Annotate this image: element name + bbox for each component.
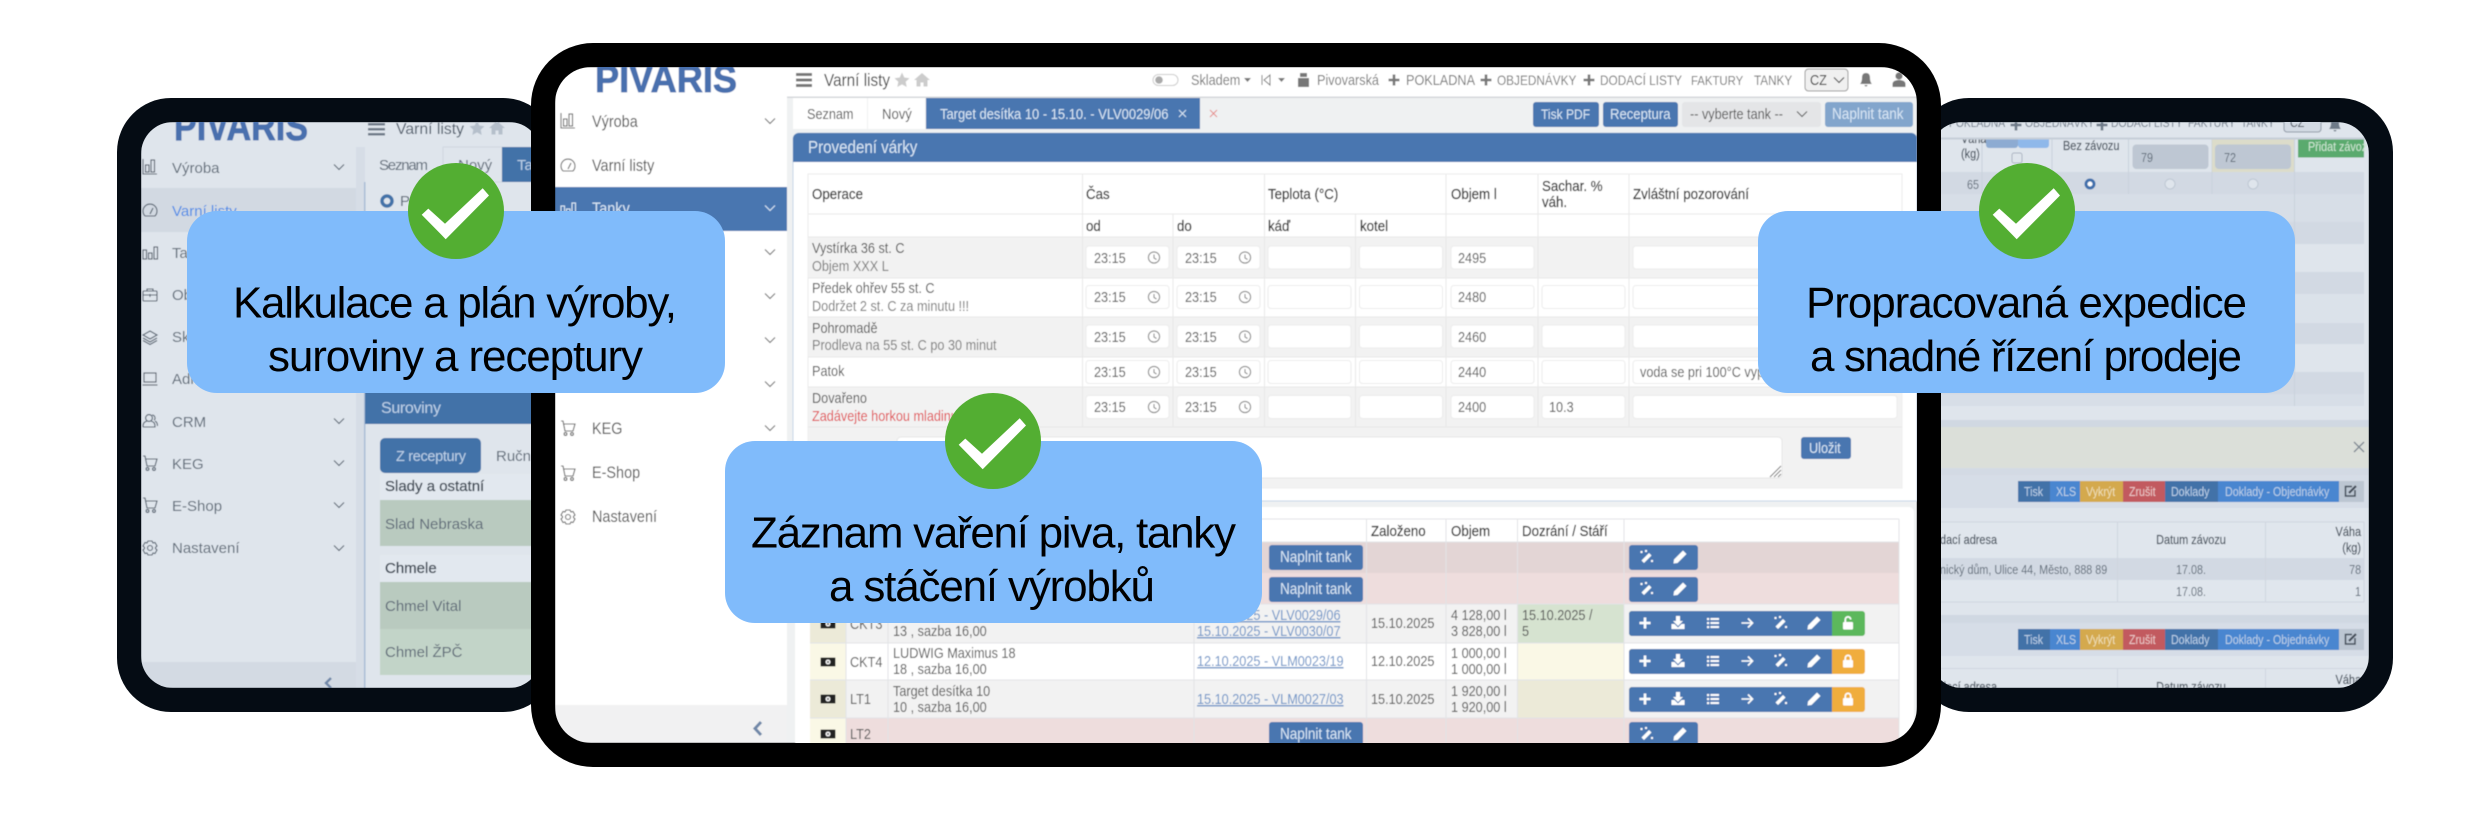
right order block 2: Doklady [2171,633,2210,647]
tank rows text: 12.10.2025 - VLM0023/19 [1197,653,1344,669]
left main content: Suroviny [381,400,441,417]
fill-tank buttons: Naplnit tank [1280,726,1352,743]
panel: brewing execution: káď [1268,218,1290,235]
center tab row: -- vyberte tank -- [1690,106,1783,122]
left sidebar navigation: Výroba [172,160,220,177]
panel: brewing execution: Čas [1086,185,1110,203]
brewing input fields: 23:15 [1094,329,1126,345]
right order block 2: Váha [2336,672,2361,687]
panel: brewing execution: Objem l [1451,186,1497,203]
panel: brewing execution: Zadávejte horkou mladinu [812,408,958,424]
center sidebar navigation: Tanky [592,200,630,218]
tank rows text: CKT4 [850,654,883,670]
tank rows text: 15.10.2025 - VLM0027/03 [1197,691,1344,707]
left main content: Chmel Vital [385,598,461,615]
right order block 1: XLS [2056,485,2076,499]
right order block 2: XLS [2056,633,2076,647]
brewing input fields: 23:15 [1185,399,1217,415]
left sidebar navigation: Objednávky [172,287,252,304]
center top bar: Skladem [1191,72,1240,88]
panel: brewing execution: Pohromadě [812,320,878,336]
center tab row: Receptura [1610,105,1671,122]
panel: brewing execution: váh. [1542,194,1567,211]
panel: brewing execution: Prodleva na 55 st. C po 30 minut [812,337,997,353]
panel: brewing execution: kotel [1360,218,1388,235]
device: left tablet, recipes and raw materials [117,98,560,712]
left main content: Pivo [400,193,429,210]
callout: dispatch and sales: a snadné řízení prodeje [1810,332,2242,381]
right top navigation: FAKTURY [2188,117,2236,130]
right order block 1: Váha [2336,524,2361,539]
tank rows text: 1 000,00 l [1451,661,1507,677]
left main content: Slady a ostatní [385,478,485,495]
center sidebar navigation: PIVARIS [595,59,737,101]
panel: brewing execution: Teplota (°C) [1268,186,1338,203]
tank rows text: 3 828,00 l [1451,623,1507,639]
left main content: Varní listy [396,121,464,138]
tank rows text: 5 [1522,623,1529,639]
left sidebar navigation: Nastavení [172,540,240,557]
left main content: Slad Nebraska [385,516,484,533]
panel: brewing execution: do [1177,218,1192,235]
center sidebar navigation [555,59,787,743]
right delivery table: 72 [2224,150,2236,165]
panel: tanks table [795,507,1914,748]
right top navigation: CZ [2290,115,2304,130]
tank rows text: LT2 [850,726,871,742]
device: right tablet, dispatch and sales [1915,98,2393,712]
callout: dispatch and sales [1758,163,2295,393]
tank rows text: 4 128,00 l [1451,607,1507,623]
callout: calculation and production plan: Kalkulace a plán výroby, [233,278,677,328]
tank rows text: Target desítka 10 [893,683,991,699]
right order block 1: Datum závozu [2156,532,2226,547]
right order block 1: Doklady [2171,485,2210,499]
left main content: Chmel ŽPČ [385,644,463,661]
right order block 2: Zrušit [2129,633,2156,647]
brewing input fields [1086,246,1897,418]
tank rows text: 15.10.2025 / [1522,607,1593,623]
center tab row: Tisk PDF [1541,106,1590,122]
callout: calculation and production plan: suroviny a receptury [268,332,643,381]
center sidebar navigation: Administrace [592,332,675,350]
tank rows text: 10 , sazba 16,00 [893,699,987,715]
panel: brewing execution: Sachar. % [1542,178,1603,195]
right order block 2 [1941,615,2369,688]
center sidebar navigation: Sklad [592,288,628,306]
brewing input fields: 23:15 [1094,399,1126,415]
left main content [356,122,531,688]
tank rows text: 18 , sazba 16,00 [893,661,987,677]
brewing input fields: 2480 [1458,289,1487,305]
panel: brewing execution: od [1086,218,1101,235]
right order block 2: Tisk [2024,633,2043,647]
right order block 1: 1 [2355,584,2361,599]
right order block 1: nický dům, Ulice 44, Město, 888 89 [1940,562,2108,577]
panel: brewing execution [793,133,1917,501]
center sidebar navigation: Objednávky [592,244,668,262]
right order block 1: dací adresa [1940,532,1997,547]
panel: tanks table: Dozrání / Stáří [1522,523,1608,540]
tank rows text: CKT3 [850,616,882,632]
left sidebar navigation: Sklad [172,329,210,346]
right order block 2: Datum závozu [2156,679,2226,694]
left sidebar navigation [141,105,356,688]
right order block 1: 17.08. [2176,584,2206,599]
tank rows text: LT1 [850,691,871,707]
tank rows text: LUDWIG Maximus 18 [893,645,1016,661]
brewing input fields: 10.3 [1549,399,1574,415]
tank rows text: 1 920,00 l [1451,683,1507,699]
right top navigation [1941,122,2366,140]
panel: brewing execution: Operace [812,186,863,203]
left main content: Nový [458,157,493,174]
brewing input fields: 23:15 [1185,329,1217,345]
center top bar: CZ [1810,72,1827,88]
tank rows text: 12.10.2025 [1371,653,1434,669]
panel: tanks table: Objem [1451,523,1490,540]
tank rows text: 15.10.2025 - VLV0030/07 [1197,623,1341,639]
center top bar: POKLADNA [1406,72,1476,88]
panel: brewing execution: Uložit [1809,440,1841,456]
right order block 1: Zrušit [2129,485,2156,499]
panel: brewing execution: Dodržet 2 st. C za minutu !!! [812,298,969,314]
tank rows text: 15.10.2025 - VLV0029/06 [1197,607,1341,623]
left main content: Ruční [496,448,536,465]
left sidebar navigation: PIVARIS [174,105,308,149]
right top navigation: TANKY [2241,117,2275,130]
panel: tanks table: Založeno [1371,523,1426,540]
right delivery table: 65 [1967,177,1979,192]
tank rows text: 15.10.2025 [1371,615,1434,631]
right order block 1: 78 [2349,562,2361,577]
center sidebar navigation: Nastavení [592,508,658,526]
left main content: Target [517,157,560,174]
tank rows text: 15.10.2025 [1371,691,1434,707]
center top bar: Pivovarská [1317,72,1379,88]
brewing input fields: 23:15 [1094,289,1126,305]
panel: brewing execution: Zvláštní pozorování [1633,186,1749,203]
right delivery table: (kg) [1961,146,1980,161]
left sidebar navigation: CRM [172,414,206,431]
fill-tank buttons: Naplnit tank [1280,581,1352,598]
callout: calculation and production plan [187,163,725,393]
center sidebar navigation: Výroba [592,113,638,131]
brewing input fields: 23:15 [1185,289,1217,305]
center sidebar navigation: CRM [592,376,625,394]
tank rows text [820,607,1593,742]
brewing input fields: 23:15 [1094,250,1126,266]
right top navigation: OBJEDNÁVKY [2025,116,2095,130]
center sidebar navigation: KEG [592,420,622,438]
tank rows text: 13 , sazba 16,00 [893,623,987,639]
left sidebar navigation: E-Shop [172,498,222,515]
center top bar [787,67,1917,98]
center top bar: DODACÍ LISTY [1600,72,1682,88]
right order block 1: Vykrýt [2086,485,2116,499]
left main content: Z receptury [396,449,467,465]
right order block 1: Tisk [2024,485,2043,499]
left main content: Seznam [379,157,428,174]
center top bar: Varní listy [824,71,891,90]
brewing input fields: 2460 [1458,329,1487,345]
left main content: Chmele [385,560,437,577]
left sidebar navigation: Tanky [172,245,212,262]
right top navigation: POKLADNA [1949,117,2006,130]
center sidebar navigation: Varní listy [592,157,655,175]
panel: brewing execution: Objem XXX L [812,258,889,274]
center top bar: OBJEDNÁVKY [1497,72,1577,88]
brewing input fields: 23:15 [1185,364,1217,380]
callout: brewing record, tanks and bottling [725,393,1262,623]
brewing input fields: 23:15 [1185,250,1217,266]
right order block 2: dací adresa [1940,679,1997,694]
center tab row: Naplnit tank [1832,106,1904,123]
center tab row: Seznam [807,106,854,122]
right order block 1 [1930,475,2369,602]
center top bar: FAKTURY [1691,73,1743,88]
center tab row [787,98,1917,743]
row action buttons [1629,545,1865,747]
center tab row: Target desítka 10 - 15.10. - VLV0029/06 [940,105,1169,122]
center tab row: Nový [882,105,913,122]
left sidebar navigation: Varní listy [172,203,237,220]
right order block 2: Vykrýt [2086,633,2116,647]
callout: dispatch and sales: Propracovaná expedice [1806,278,2247,328]
right alert bar [1930,420,2369,475]
right delivery table: Váha [1961,131,1987,146]
device: center tablet, brewing record [531,43,1941,767]
brewing input fields: voda se pri 100°C vypíná [1640,364,1782,380]
callout: brewing record, tanks and bottling: a stáčení výrobků [829,562,1155,611]
brewing input fields: 2440 [1458,364,1487,380]
center sidebar navigation: E-Shop [592,464,640,482]
tank rows text: 1 920,00 l [1451,699,1507,715]
panel: brewing execution: Provedení várky [808,138,918,157]
panel: brewing execution: Patok [812,363,845,379]
tank rows text: 1 000,00 l [1451,645,1507,661]
right delivery table [1930,131,2367,406]
panel: brewing execution: Dovařeno [812,390,867,406]
left sidebar navigation: KEG [172,456,204,473]
brewing input fields: 2400 [1458,399,1487,415]
right order block 1: Doklady - Objednávky [2225,485,2329,499]
fill-tank buttons: Naplnit tank [1280,549,1352,566]
brewing input fields: 23:15 [1094,364,1126,380]
panel: brewing execution: Vystírka 36 st. C [812,240,905,256]
right order block 1: 17.08. [2176,562,2206,577]
callout: brewing record, tanks and bottling: Záznam vaření piva, tanky [751,508,1236,558]
brewing input fields: 2495 [1458,250,1486,266]
center top bar: TANKY [1754,73,1793,88]
panel: brewing execution: Předek ohřev 55 st. C [812,280,935,296]
right order block 1: (kg) [2342,540,2361,555]
right delivery table: Bez závozu [2063,138,2119,153]
fill-tank buttons [1269,545,1363,747]
right delivery table: 79 [2141,150,2153,165]
left sidebar navigation: Administrace [172,371,259,388]
right delivery table: Přidat závoz [2308,139,2367,154]
right order block 2: Doklady - Objednávky [2225,633,2329,647]
right top navigation: DODACÍ LISTY [2111,116,2183,130]
